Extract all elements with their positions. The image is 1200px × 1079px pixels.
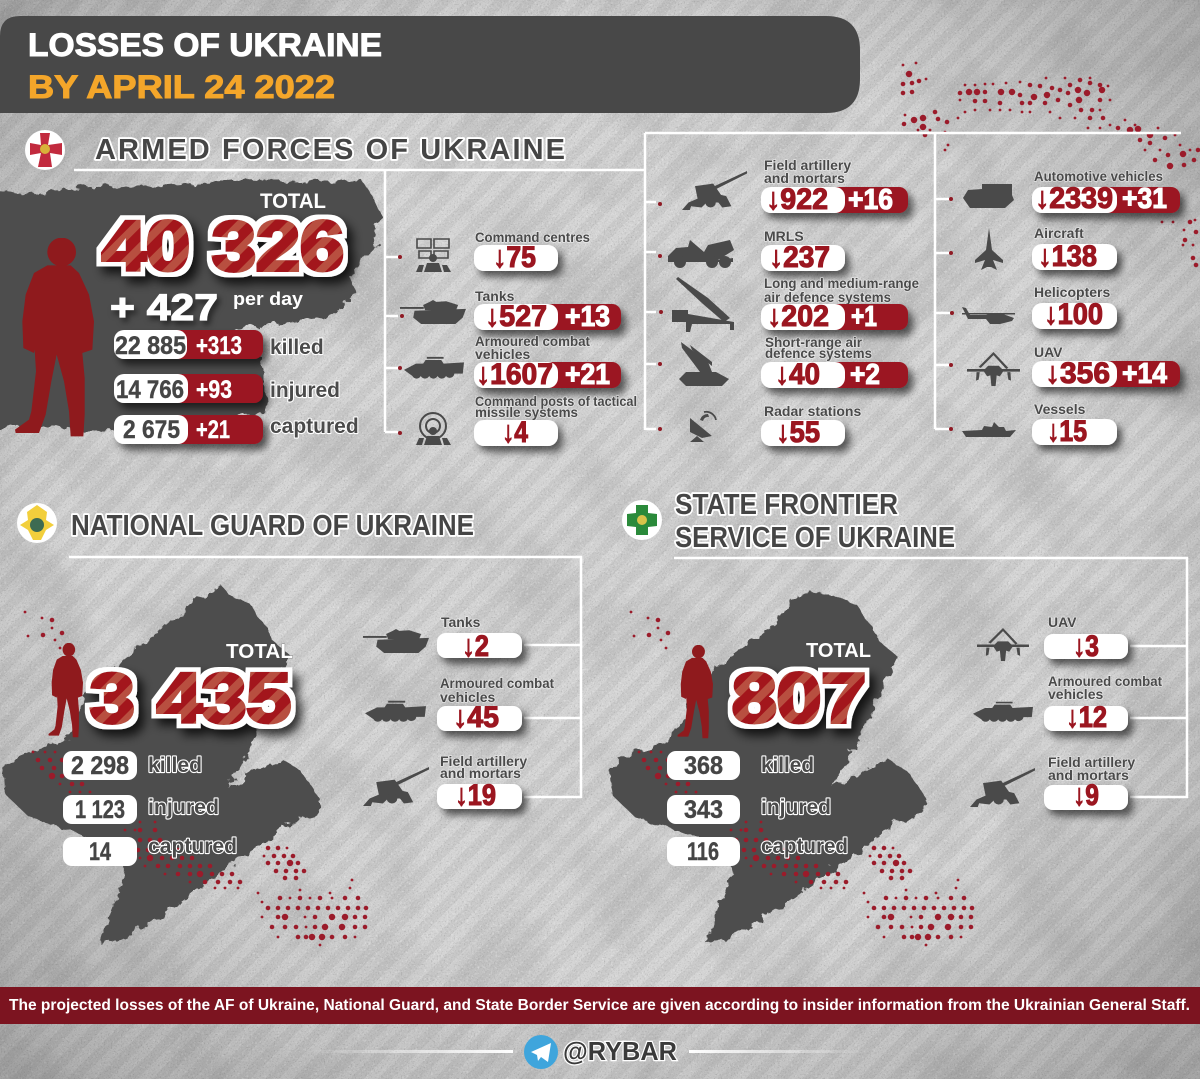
icon: howitzer	[682, 171, 748, 210]
stat: captured: +21	[196, 416, 230, 444]
item: aircraft: ↓138	[1038, 240, 1097, 273]
soldier silhouette	[48, 643, 83, 737]
icon: telegram	[524, 1035, 558, 1069]
heading: state frontier service: SERVICE OF UKRAINE	[675, 522, 955, 554]
emblem: national guard	[17, 503, 57, 543]
stat: killed: 22 885	[115, 332, 186, 360]
icon: tank	[400, 300, 466, 324]
item: radar stations: Radar stations	[764, 403, 861, 419]
item: armoured vehicles: Armoured combat	[440, 675, 554, 691]
item: automotive vehicles: +31	[1122, 183, 1167, 215]
stat: killed: killed	[270, 336, 324, 359]
item: UAV	[1032, 344, 1180, 390]
halftone splatter: top right	[903, 63, 1198, 265]
stat: captured: captured	[270, 415, 359, 438]
stat: injured: 1 123	[75, 796, 125, 824]
stat: killed: killed	[761, 754, 814, 777]
icon: howitzer	[970, 768, 1036, 807]
total label: TOTAL	[806, 640, 871, 662]
item: UAV	[1044, 614, 1128, 663]
soldier silhouette	[15, 238, 94, 436]
item: helicopters: Helicopters	[1034, 284, 1110, 300]
item: UAV: ↓3	[1073, 630, 1099, 663]
icon: MRLS	[668, 240, 734, 268]
icon: tank	[363, 629, 429, 653]
item: field artillery: ↓922	[766, 183, 828, 216]
item: automotive vehicles: ↓2339	[1035, 182, 1113, 215]
stat: captured: captured	[761, 835, 848, 858]
item: armoured vehicles: ↓45	[453, 701, 499, 734]
item: short-range	[761, 334, 908, 391]
total label: TOTAL	[226, 641, 293, 663]
item: helicopters: ↓100	[1044, 298, 1103, 331]
soldier silhouette	[677, 645, 713, 738]
panel: state frontier service of Ukraine	[610, 489, 1187, 945]
item: field artillery: and mortars	[764, 170, 845, 186]
item: automotive vehicles	[1032, 168, 1180, 215]
item: command posts: ↓4	[502, 416, 528, 449]
footer handle	[306, 1035, 868, 1069]
stat: captured: 2 675	[123, 416, 180, 444]
item: field artillery	[437, 753, 527, 812]
icon: armoured vehicle	[973, 702, 1033, 722]
item: command centres: Command centres	[475, 229, 590, 245]
title line 2: BY APRIL 24 2022	[28, 69, 335, 105]
item: radar stations: ↓55	[776, 416, 820, 449]
icon: automotive vehicle	[963, 184, 1014, 208]
item: command posts: Command posts of tactical	[475, 393, 637, 409]
heading: armed forces: ARMED FORCES OF UKRAINE	[95, 134, 565, 166]
stat: captured	[667, 835, 848, 866]
stat: injured: 343	[684, 796, 723, 824]
item: UAV: UAV	[1034, 344, 1063, 360]
item: long and medium-range: Long and medium-range	[764, 275, 919, 291]
item: UAV: +14	[1122, 358, 1167, 390]
connector lines	[674, 558, 1187, 797]
stat: injured: injured	[148, 796, 219, 819]
item: vessels: ↓15	[1047, 415, 1087, 448]
stat: injured: 14 766	[116, 376, 184, 404]
item: short-range: ↓40	[775, 358, 820, 391]
item: command posts	[474, 393, 637, 449]
icon: radar	[690, 412, 716, 442]
icon: howitzer	[363, 767, 430, 806]
item: armoured combat vehicles: Armoured combat	[475, 333, 590, 349]
item: helicopters	[1032, 284, 1117, 331]
stat: injured	[63, 795, 219, 824]
item: tanks: ↓2	[462, 630, 489, 663]
stat: captured	[114, 415, 359, 444]
heading: state frontier service: STATE FRONTIER	[675, 489, 898, 521]
icon: long range air defence	[672, 277, 734, 332]
icon: short range air defence	[679, 342, 729, 386]
item: field artillery: Field artillery	[440, 753, 527, 769]
total number: 807	[732, 659, 866, 737]
connector lines	[74, 133, 1181, 432]
item: MRLS: MRLS	[764, 228, 804, 244]
item: command centres	[474, 229, 590, 274]
emblem: armed forces cross	[25, 130, 65, 170]
emblem: state frontier service	[622, 500, 662, 540]
item: tanks: Tanks	[441, 614, 481, 630]
item: armoured combat vehicles: ↓1607	[476, 358, 553, 391]
heading: national guard: NATIONAL GUARD OF UKRAINE	[71, 510, 474, 542]
per day label: per day	[233, 289, 303, 309]
total number: 3 435	[90, 659, 291, 737]
total label: TOTAL	[260, 190, 326, 213]
stat: killed: 368	[684, 752, 723, 780]
brush background	[0, 179, 383, 432]
item: armoured combat vehicles: +21	[565, 359, 610, 391]
item: radar stations	[761, 403, 861, 449]
item: armoured vehicles: vehicles	[440, 689, 495, 705]
stat: injured	[667, 795, 831, 824]
item: short-range: defence systems	[765, 345, 872, 361]
item: field artillery: Field artillery	[1048, 754, 1135, 770]
title line 1: LOSSES OF UKRAINE	[28, 27, 382, 63]
item: MRLS	[761, 228, 845, 274]
item: long and medium-range: air defence systems	[764, 289, 891, 305]
item: field artillery: and mortars	[440, 765, 521, 781]
stat: killed	[114, 330, 324, 360]
icon: command centre	[416, 239, 451, 272]
item: armoured vehicles: Armoured combat	[1048, 673, 1162, 689]
item: long and medium-range: +1	[851, 301, 877, 333]
stat: captured: 116	[687, 838, 719, 866]
item: field artillery: Field artillery	[764, 157, 851, 173]
item: UAV: ↓356	[1045, 357, 1110, 390]
stat: killed	[63, 751, 202, 780]
footer band	[0, 987, 1200, 1024]
item: field artillery: +16	[848, 184, 893, 216]
item: aircraft	[1032, 225, 1117, 273]
stat: captured: 14	[89, 838, 111, 866]
item: armoured vehicles	[437, 675, 554, 734]
stat: killed: 2 298	[71, 752, 129, 780]
item: field artillery	[761, 157, 908, 216]
stat: injured	[114, 374, 340, 404]
item: vessels	[1032, 401, 1117, 448]
item: tanks: ↓527	[485, 300, 547, 333]
total number: 40 326	[102, 207, 344, 285]
item: tanks	[474, 288, 621, 333]
brush background	[4, 586, 321, 945]
stat: injured: injured	[270, 379, 340, 402]
item: vessels: Vessels	[1034, 401, 1086, 417]
icon: aircraft	[975, 228, 1003, 270]
stat: injured: +93	[196, 376, 232, 404]
stat: injured: injured	[761, 796, 831, 819]
item: tanks: +13	[565, 301, 610, 333]
title panel	[0, 16, 860, 113]
item: field artillery	[1044, 754, 1135, 812]
handle text: @RYBAR	[563, 1036, 677, 1066]
item: long and medium-range	[761, 275, 919, 333]
stat: killed: +313	[196, 332, 242, 360]
icon: command post	[416, 413, 451, 445]
icon: helicopter	[962, 307, 1015, 324]
icon: UAV	[977, 628, 1029, 661]
icon: UAV	[967, 352, 1020, 386]
item: command posts: missile systems	[475, 404, 578, 420]
item: command centres: ↓75	[493, 241, 536, 274]
panel: armed forces of Ukraine	[0, 130, 1181, 449]
item: armoured vehicles	[1044, 673, 1162, 734]
item: tanks: Tanks	[475, 288, 515, 304]
stat: killed: killed	[148, 754, 202, 777]
heading: state frontier service	[675, 489, 955, 554]
item: automotive vehicles: Automotive vehicles	[1034, 168, 1163, 184]
brush background	[610, 592, 927, 945]
stat: captured: captured	[148, 835, 237, 858]
halftone splatter	[631, 612, 972, 945]
item: aircraft: Aircraft	[1034, 225, 1084, 241]
item: short-range: Short-range air	[765, 334, 863, 350]
item: long and medium-range: ↓202	[767, 300, 829, 333]
stat: captured	[63, 835, 237, 866]
item: short-range: +2	[850, 359, 880, 391]
panel: national guard of Ukraine	[4, 503, 581, 945]
stat: killed	[667, 751, 814, 780]
item: tanks	[437, 614, 522, 663]
item: armoured combat vehicles: vehicles	[475, 346, 530, 362]
item: armoured combat vehicles	[474, 333, 621, 391]
footer note: The projected losses of the AF of Ukraine, National Guard, and State Border Service are given according to insider information from the Ukrainian General Staff.	[9, 997, 1190, 1014]
item: armoured vehicles: ↓12	[1066, 701, 1107, 734]
icon: armoured vehicle	[365, 701, 426, 722]
item: field artillery: ↓9	[1073, 779, 1099, 812]
item: armoured vehicles: vehicles	[1048, 686, 1103, 702]
item: UAV: UAV	[1048, 614, 1077, 630]
daily gain: + 427	[110, 287, 218, 328]
item: field artillery: and mortars	[1048, 767, 1129, 783]
item: MRLS: ↓237	[769, 241, 830, 274]
connector lines	[69, 557, 581, 797]
icon: armoured vehicle	[404, 357, 464, 379]
halftone splatter	[25, 612, 366, 945]
icon: vessel	[962, 422, 1016, 437]
connector dots	[398, 197, 954, 435]
item: field artillery: ↓19	[455, 779, 496, 812]
